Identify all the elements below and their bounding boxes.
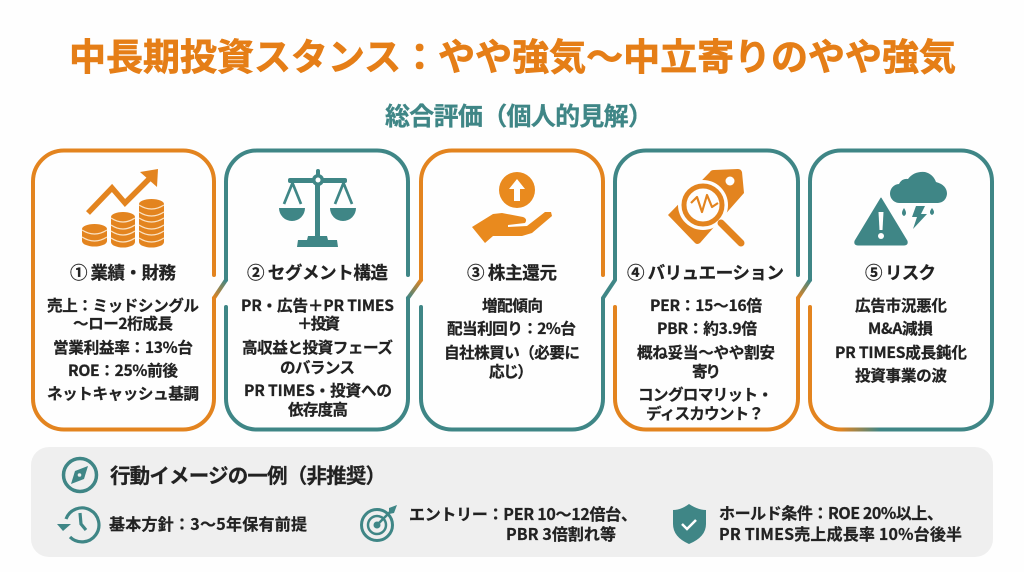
hold condition text: PR TIMES売上成長率 10%台後半 [719, 521, 962, 545]
panel: card 1 performance [47, 169, 199, 404]
text block: ディスカウント？ [646, 402, 764, 424]
text block: 概ね妥当～やや割安 [637, 341, 775, 363]
hold condition text: ホールド条件：ROE 20%以上、 [719, 500, 943, 524]
heading: ③ 株主還元 [467, 260, 557, 285]
text block: 営業利益率：13%台 [53, 336, 193, 358]
text block: 広告市況悪化 [855, 294, 947, 316]
text block: ～ロー2桁成長 [73, 312, 173, 334]
text block: ネットキャッシュ基調 [47, 382, 199, 404]
text block: 自社株買い（必要に [444, 341, 580, 363]
heading: ⑤ リスク [865, 260, 936, 285]
text block: 依存度高 [288, 398, 348, 420]
basic policy text: 基本方針：3～5年保有前提 [109, 511, 307, 535]
icon: balance scale [279, 169, 356, 247]
text block: 高収益と投資フェーズ [242, 336, 393, 358]
icon: coins and rising arrow [82, 169, 164, 248]
text block [241, 294, 394, 420]
text block [835, 294, 967, 386]
text block: 増配傾向 [482, 294, 543, 316]
panel: card 4 valuation [627, 169, 784, 424]
text block: 寄り [692, 360, 721, 382]
text block: のバランス [280, 356, 355, 378]
text block [637, 294, 775, 424]
text block: ROE：25%前後 [68, 359, 178, 381]
text block: PBR：約3.9倍 [657, 317, 757, 339]
text block: PR・広告＋PR TIMES [241, 294, 394, 316]
title: 中長期投資スタンス：やや強気～中立寄りのやや強気 [69, 27, 956, 81]
text block: M&A減損 [868, 317, 933, 339]
entry text: PBR 3倍割れ等 [506, 521, 616, 545]
heading: ④ バリュエーション [627, 260, 784, 285]
text block: PR TIMES・投資への [244, 379, 392, 401]
icon: warning and storm cloud [855, 172, 947, 245]
icon: target [362, 505, 397, 540]
entry text: エントリー：PER 10～12倍台、 [409, 501, 637, 525]
icon: compass [64, 458, 96, 492]
icon: price tag and magnifier [668, 169, 744, 244]
panel: card 5 risk [835, 172, 967, 386]
text block: ＋投資 [297, 312, 340, 334]
card outlines [33, 150, 992, 430]
action heading: 行動イメージの一例（非推奨） [110, 459, 386, 489]
hold condition text [719, 500, 962, 545]
entry text [409, 501, 637, 545]
heading: ① 業績・財務 [70, 260, 176, 285]
panel: card 2 segments [241, 169, 394, 420]
text block: 応じ） [489, 360, 533, 382]
icon: hand with up arrow coin [472, 172, 552, 243]
text block: 投資事業の波 [855, 364, 947, 386]
text block: 配当利回り：2%台 [447, 317, 576, 339]
text block: PER：15～16倍 [650, 294, 762, 316]
text block: 売上：ミッドシングル [47, 294, 199, 316]
text block [47, 294, 199, 404]
text block [444, 294, 580, 382]
subtitle: 総合評価（個人的見解） [385, 97, 653, 133]
heading: ② セグメント構造 [247, 260, 388, 285]
panel: card 3 shareholder returns [444, 172, 580, 382]
text block: PR TIMES成長鈍化 [835, 341, 967, 363]
panel: action image [31, 447, 993, 557]
icon: clock history [57, 508, 99, 542]
text block: コングロマリット・ [638, 383, 773, 405]
icon: shield check [673, 504, 706, 544]
